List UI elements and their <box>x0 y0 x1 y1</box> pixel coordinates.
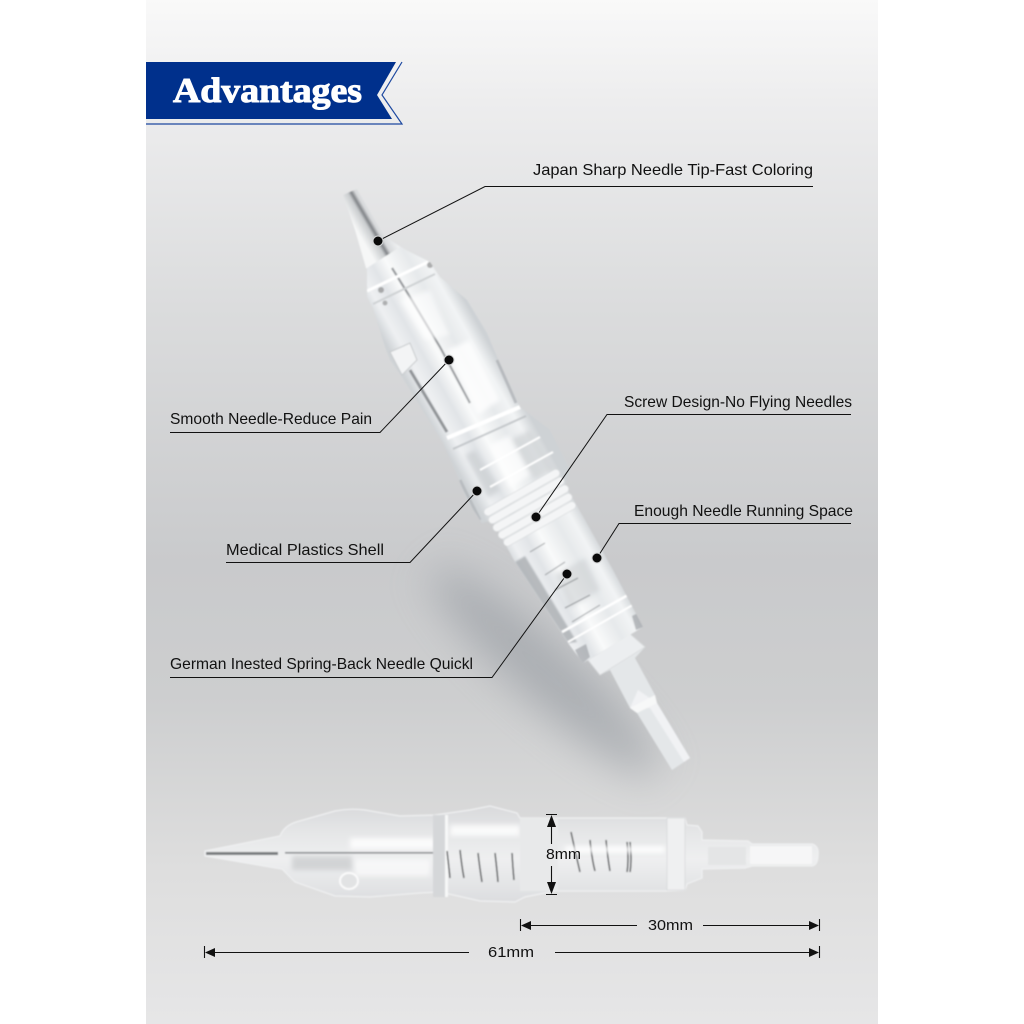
dimension: 61mm: 61mm <box>488 944 534 961</box>
callout: Smooth Needle: Smooth Needle-Reduce Pain <box>170 411 372 428</box>
dimension: 61mm <box>204 944 820 961</box>
callout: Japan Sharp Needle Tip <box>373 162 813 246</box>
shell internal details <box>367 262 643 664</box>
barrel highlights <box>565 846 665 853</box>
needle shadow <box>413 549 677 795</box>
cartridge shell <box>367 247 643 663</box>
callout: German Inested Spring-Back: German Inested Spring-Back Needle Quickl <box>170 656 473 673</box>
callout: Medical Plastics Shell: Medical Plastics Shell <box>226 542 384 559</box>
needle pin end <box>588 634 690 770</box>
needle tip cone <box>343 189 412 272</box>
shell highlights <box>350 838 435 849</box>
threaded rings <box>483 468 579 549</box>
central needle line <box>206 852 278 855</box>
callout: German Inested Spring-Back <box>170 569 572 678</box>
thread section <box>520 818 558 891</box>
callout: Enough Needle Running Space <box>592 503 853 563</box>
dimension: 8mm <box>546 814 581 894</box>
spring coils <box>447 832 631 882</box>
callout: Enough Needle Running Space: Enough Needle Running Space <box>634 503 853 520</box>
heading banner: Advantages <box>146 62 402 124</box>
callout: Medical Plastics Shell <box>226 486 482 562</box>
horizontal needle cartridge photo <box>205 806 818 902</box>
heading banner: Advantages: Advantages <box>173 71 362 110</box>
callout: Smooth Needle <box>170 355 454 432</box>
diagonal needle cartridge photo <box>343 189 690 770</box>
callout: Screw Design: Screw Design-No Flying Needles <box>624 394 852 411</box>
dimension: 30mm <box>520 917 820 934</box>
panel: grey gradient background <box>146 0 878 1024</box>
callout: Japan Sharp Needle Tip: Japan Sharp Needle Tip-Fast Coloring <box>533 162 813 179</box>
callout: Screw Design <box>531 394 852 522</box>
cartridge silhouette <box>205 806 818 902</box>
dimension: 30mm: 30mm <box>648 917 693 934</box>
dimension: 8mm: 8mm <box>546 846 581 863</box>
